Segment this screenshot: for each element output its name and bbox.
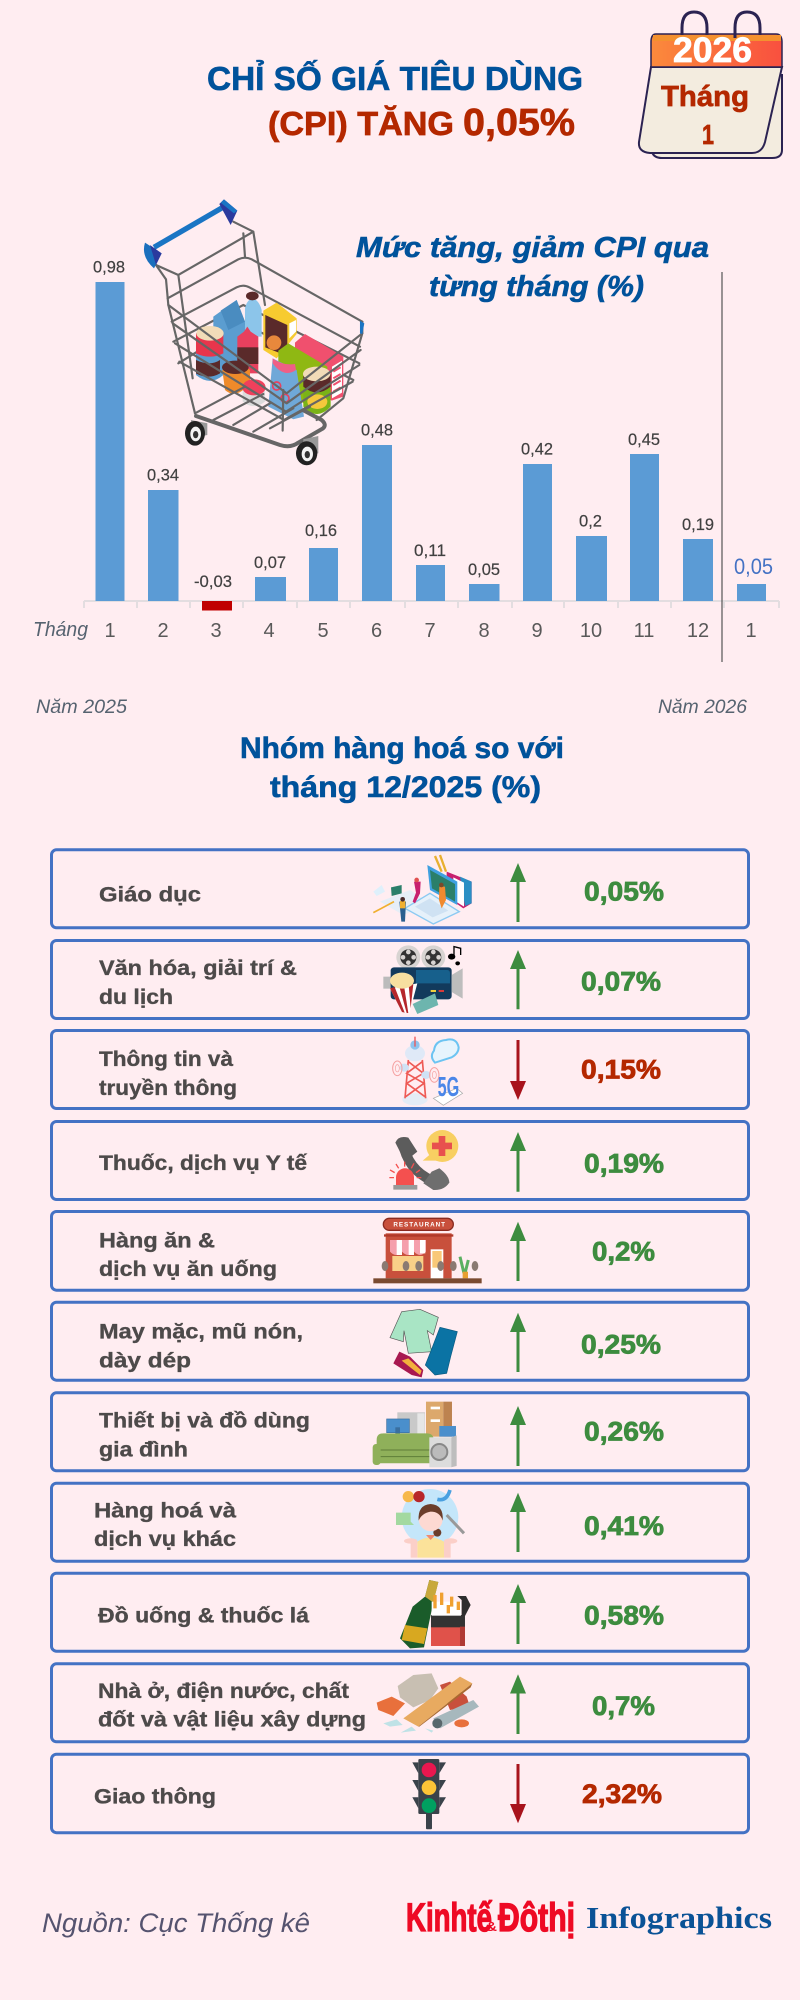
row: Thiết bị và đồ dùng gia đình — [52, 1393, 748, 1471]
bar values: 0,45 — [628, 430, 660, 449]
icon: emergency phone — [389, 1130, 458, 1190]
row: Nhà ở, điện nước, chất đốt và vật liệu xây dựng: 0,7% — [592, 1691, 655, 1721]
cart wheels — [185, 420, 318, 465]
icon: film camera — [383, 945, 463, 1014]
month labels: Tháng — [33, 619, 88, 641]
row: May mặc, mũ nón, dày dép: dày dép — [99, 1349, 191, 1372]
bar values: 0,2 — [579, 512, 602, 530]
row: Văn hóa, giải trí & du lịch: du lịch — [99, 986, 173, 1009]
title — [207, 59, 583, 144]
month labels: 1 — [745, 620, 757, 642]
arrow up — [510, 1406, 526, 1466]
row: Hàng hoá và dịch vụ khác: 0,41% — [584, 1511, 664, 1541]
row: Hàng ăn & dịch vụ ăn uống — [52, 1212, 748, 1290]
row: Thông tin và truyền thông — [52, 1030, 748, 1108]
row: Giáo dục — [52, 850, 748, 928]
icon: education — [373, 855, 472, 924]
groceries — [196, 292, 343, 419]
month labels: 1 — [104, 620, 116, 642]
year separator — [721, 272, 723, 662]
title: (CPI) TĂNG — [268, 105, 454, 142]
row: Văn hóa, giải trí & du lịch: 0,07% — [581, 967, 661, 997]
logo: Infographics — [586, 1900, 772, 1935]
cart handle — [144, 199, 364, 334]
row: Giao thông: Giao thông — [94, 1785, 216, 1808]
month labels: 11 — [634, 620, 654, 642]
row: Thuốc, dịch vụ Y tế: 0,19% — [584, 1148, 664, 1178]
row: Thiết bị và đồ dùng gia đình: Thiết bị và đồ dùng — [99, 1410, 310, 1433]
icon: 5G tower — [393, 1037, 463, 1105]
arrow up — [510, 1674, 526, 1734]
bars — [96, 282, 766, 610]
row: Thuốc, dịch vụ Y tế — [52, 1122, 748, 1200]
icon: calendar: 1 — [702, 119, 714, 150]
row: May mặc, mũ nón, dày dép: May mặc, mũ nón, — [99, 1320, 303, 1343]
arrow down — [510, 1764, 526, 1823]
icon: shopping cart — [144, 199, 364, 465]
icon: champagne and cigarettes — [400, 1580, 471, 1648]
arrow up — [510, 1584, 526, 1644]
row: Giáo dục: Giáo dục — [99, 884, 201, 907]
month labels: 12 — [687, 620, 709, 642]
row: Hàng ăn & dịch vụ ăn uống: dịch vụ ăn uống — [99, 1258, 277, 1281]
icon: calendar: Tháng — [661, 81, 749, 113]
arrow up — [510, 1313, 526, 1372]
bar values — [93, 258, 773, 591]
row: Hàng hoá và dịch vụ khác: dịch vụ khác — [94, 1528, 236, 1551]
row: Hàng hoá và dịch vụ khác — [52, 1483, 748, 1561]
arrow down — [510, 1040, 526, 1100]
month labels: 7 — [424, 620, 436, 642]
arrow up — [510, 1493, 526, 1552]
title: 0,05% — [463, 102, 575, 144]
row: Đồ uống & thuốc lá: Đồ uống & thuốc lá — [98, 1605, 309, 1628]
bar values: 0,48 — [361, 420, 393, 440]
section heading — [240, 732, 564, 804]
bar values: 0,11 — [414, 541, 446, 560]
row: Hàng hoá và dịch vụ khác: Hàng hoá và — [94, 1499, 236, 1522]
row: Nhà ở, điện nước, chất đốt và vật liệu xây dựng: đốt và vật liệu xây dựng — [98, 1709, 366, 1732]
arrow up — [510, 1132, 526, 1192]
section heading: Nhóm hàng hoá so với — [240, 732, 564, 765]
row: May mặc, mũ nón, dày dép — [52, 1302, 748, 1380]
row: Thông tin và truyền thông: 0,15% — [581, 1054, 661, 1084]
row: May mặc, mũ nón, dày dép: 0,25% — [581, 1329, 661, 1359]
chart heading: Mức tăng, giảm CPI qua — [356, 232, 709, 264]
icon: restaurant — [373, 1218, 482, 1283]
logo: Kinhtế — [406, 1896, 493, 1940]
title: CHỈ SỐ GIÁ TIÊU DÙNG — [207, 59, 583, 97]
bar values: 0,05 — [734, 554, 773, 579]
icon: calendar: 2026 — [673, 31, 752, 70]
row: Giao thông: 2,32% — [582, 1779, 662, 1809]
month labels: 4 — [263, 620, 275, 642]
row: Nhà ở, điện nước, chất đốt và vật liệu xây dựng — [52, 1664, 748, 1742]
month labels: 6 — [371, 620, 382, 642]
axis — [84, 601, 779, 608]
row: Văn hóa, giải trí & du lịch — [52, 940, 748, 1018]
cart front frame — [168, 305, 362, 446]
row: Giáo dục: 0,05% — [584, 877, 664, 907]
row: Thuốc, dịch vụ Y tế: Thuốc, dịch vụ Y tế — [99, 1152, 307, 1175]
row: Hàng ăn & dịch vụ ăn uống: Hàng ăn & — [99, 1229, 215, 1252]
arrow up — [510, 950, 526, 1009]
year labels — [36, 697, 747, 718]
icon: restaurant: RESTAURANT — [393, 1222, 445, 1229]
bar values: 0,05 — [468, 560, 500, 579]
bar values: 0,42 — [521, 440, 553, 458]
section heading: tháng 12/2025 (%) — [270, 771, 541, 804]
row: Đồ uống & thuốc lá — [52, 1573, 748, 1651]
month labels: 2 — [157, 620, 169, 642]
chart heading — [356, 232, 709, 303]
bar values: 0,07 — [254, 553, 286, 572]
icon: 5G tower: 5G — [438, 1071, 459, 1102]
bar values: 0,19 — [682, 515, 714, 534]
bar values: -0,03 — [194, 572, 232, 591]
row: Thiết bị và đồ dùng gia đình: 0,26% — [584, 1417, 664, 1447]
source: Nguồn: Cục Thống kê — [42, 1908, 310, 1938]
icon: household appliances — [373, 1402, 457, 1467]
cart back frame — [156, 222, 362, 413]
bar values: 0,34 — [147, 466, 179, 484]
bar chart: monthly CPI — [33, 258, 779, 718]
icon: traffic light — [412, 1759, 446, 1829]
row: Đồ uống & thuốc lá: 0,58% — [584, 1600, 664, 1630]
row: Thông tin và truyền thông: truyền thông — [99, 1077, 237, 1100]
row: Thiết bị và đồ dùng gia đình: gia đình — [99, 1439, 188, 1462]
logo — [406, 1896, 772, 1940]
icon: building materials — [377, 1673, 479, 1733]
row: Nhà ở, điện nước, chất đốt và vật liệu xây dựng: Nhà ở, điện nước, chất — [98, 1680, 349, 1703]
row: Thông tin và truyền thông: Thông tin và — [99, 1048, 233, 1071]
row: Văn hóa, giải trí & du lịch: Văn hóa, giải trí & — [99, 957, 297, 980]
logo: & — [486, 1919, 497, 1934]
year labels: Năm 2026 — [658, 697, 747, 718]
month labels: 9 — [531, 620, 543, 642]
chart heading: từng tháng (%) — [429, 271, 644, 303]
year labels: Năm 2025 — [36, 697, 127, 718]
row: Giao thông — [52, 1754, 748, 1833]
arrow up — [510, 1222, 526, 1281]
icon: customer service — [396, 1489, 464, 1558]
bar values: 0,98 — [93, 258, 125, 276]
icon: clothes — [390, 1309, 457, 1377]
icon: calendar — [639, 12, 782, 158]
month labels: 3 — [210, 620, 222, 642]
bar values: 0,16 — [305, 521, 337, 540]
month labels: 5 — [317, 620, 329, 642]
month labels — [33, 619, 757, 642]
logo: Đôthị — [498, 1896, 575, 1940]
month labels: 8 — [478, 620, 490, 642]
arrow up — [510, 863, 526, 922]
row: Hàng ăn & dịch vụ ăn uống: 0,2% — [592, 1237, 655, 1267]
month labels: 10 — [580, 620, 602, 642]
